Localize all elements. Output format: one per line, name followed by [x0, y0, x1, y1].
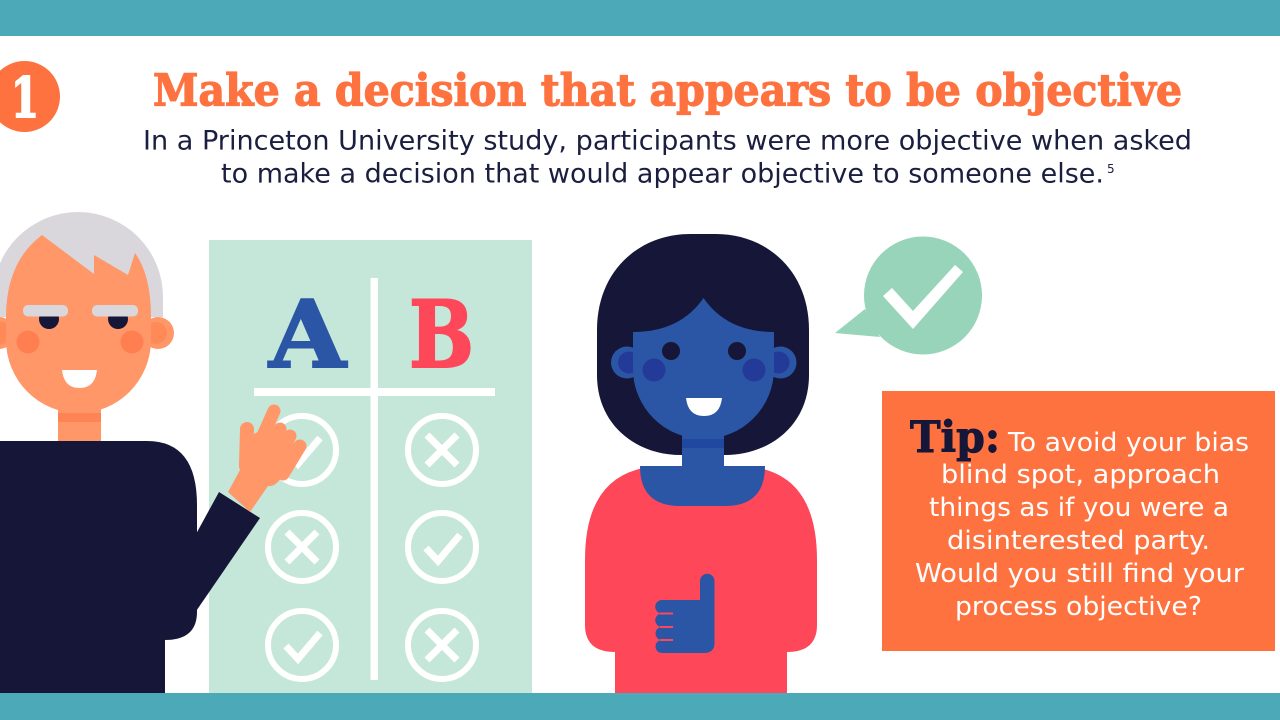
cheeks — [642, 358, 666, 382]
face — [633, 298, 774, 439]
torso — [0, 441, 197, 693]
tip text: blind spot, approach — [941, 460, 1220, 490]
tip text: Would you still find your — [915, 559, 1245, 589]
man figure — [0, 212, 300, 693]
number badge: 1 — [11, 65, 39, 130]
face — [6, 235, 151, 413]
eyes — [39, 309, 59, 329]
pointing hand — [228, 411, 300, 512]
tip text: To avoid your bias — [1007, 428, 1249, 458]
sleeve — [190, 492, 260, 620]
eyebrows — [23, 305, 68, 316]
thumbs up hand — [655, 574, 714, 653]
woman figure — [585, 234, 817, 693]
check and cross marks — [268, 416, 476, 679]
eyes — [662, 342, 680, 360]
column letter B: B — [409, 280, 474, 389]
intro text: 5 — [1107, 162, 1115, 176]
neck — [58, 405, 101, 443]
hair — [0, 212, 163, 317]
tip text — [910, 413, 1249, 622]
cheeks — [16, 330, 40, 354]
tip text: process objective? — [955, 592, 1202, 622]
speech bubble with check — [835, 236, 982, 354]
panel: A/B checklist — [209, 240, 532, 693]
red top — [585, 466, 817, 693]
title: Make a decision that appears to be objective — [153, 66, 1182, 116]
top teal band — [0, 0, 1280, 36]
bottom teal band — [0, 693, 1280, 720]
intro text — [143, 126, 1192, 190]
mouth — [686, 398, 722, 416]
column letter A: A — [268, 280, 348, 389]
number badge — [0, 61, 60, 132]
tip text: Tip: — [910, 413, 1000, 463]
tip box — [882, 391, 1275, 651]
tip text: things as if you were a — [929, 493, 1229, 523]
tip text: disinterested party. — [947, 526, 1210, 556]
intro text: In a Princeton University study, participants were more objective when asked — [143, 126, 1192, 156]
ears — [611, 346, 643, 378]
hair — [597, 234, 809, 455]
intro text: to make a decision that would appear objective to someone else. — [221, 158, 1104, 190]
neck and collar — [640, 430, 765, 506]
ears — [142, 317, 174, 349]
mouth — [62, 370, 97, 388]
